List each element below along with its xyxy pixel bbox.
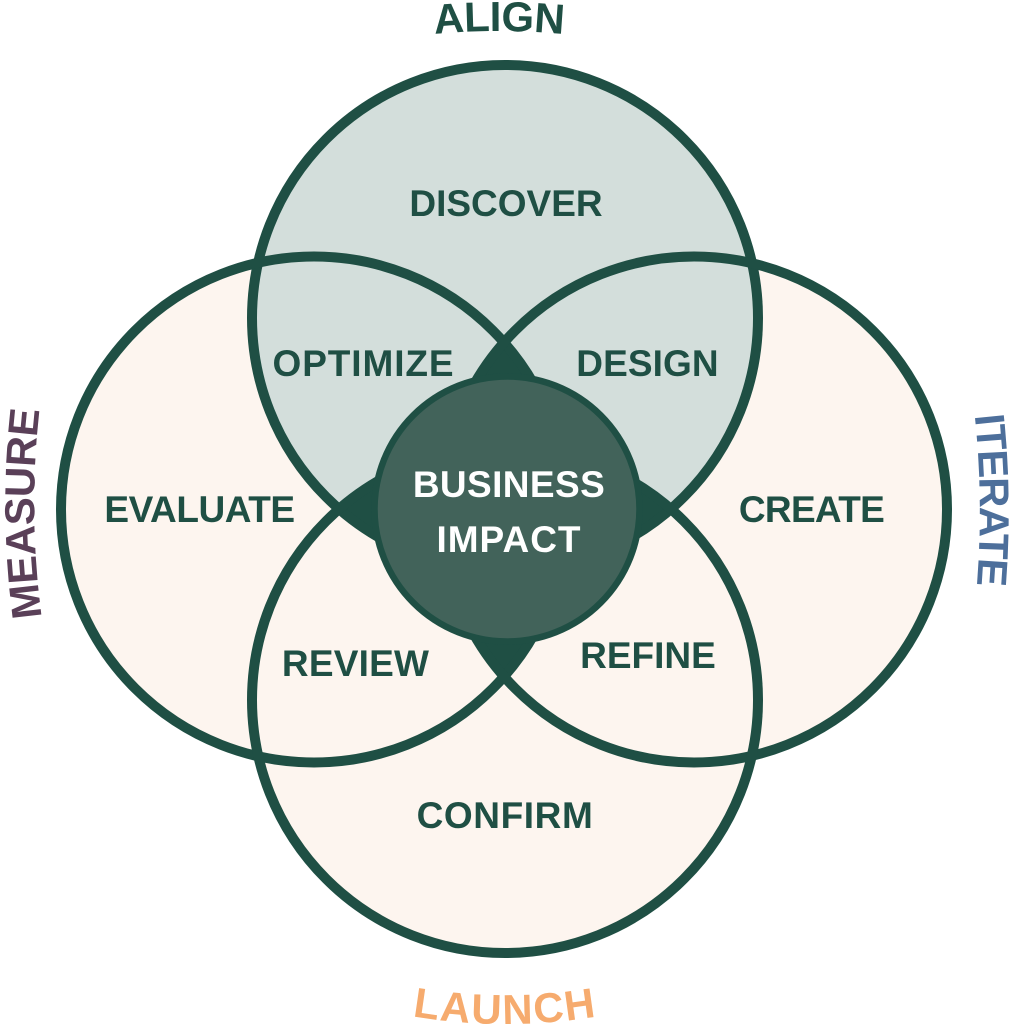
circle fill: top bbox=[252, 65, 758, 571]
label: evaluate: EVALUATE bbox=[104, 489, 295, 530]
label: review: REVIEW bbox=[282, 643, 429, 684]
dark horizontal lens between top and bottom circles bbox=[338, 446, 672, 572]
dark vertical lens between left and right circles bbox=[442, 342, 568, 676]
center circle: business impact: BUSINESS bbox=[413, 464, 605, 505]
label: design: DESIGN bbox=[576, 343, 719, 384]
label: create: CREATE bbox=[739, 489, 884, 530]
label: confirm: CONFIRM bbox=[417, 795, 593, 836]
center circle: business impact: IMPACT bbox=[436, 519, 582, 560]
label: optimize: OPTIMIZE bbox=[273, 343, 454, 384]
circle outlines bbox=[61, 65, 947, 953]
circle fill: bottom bbox=[252, 447, 758, 953]
label: discover: DISCOVER bbox=[409, 183, 603, 224]
circle fill: right bbox=[441, 256, 947, 762]
label: refine: REFINE bbox=[580, 635, 716, 676]
center circle: business impact bbox=[374, 376, 640, 642]
circle fill: left bbox=[61, 256, 567, 762]
